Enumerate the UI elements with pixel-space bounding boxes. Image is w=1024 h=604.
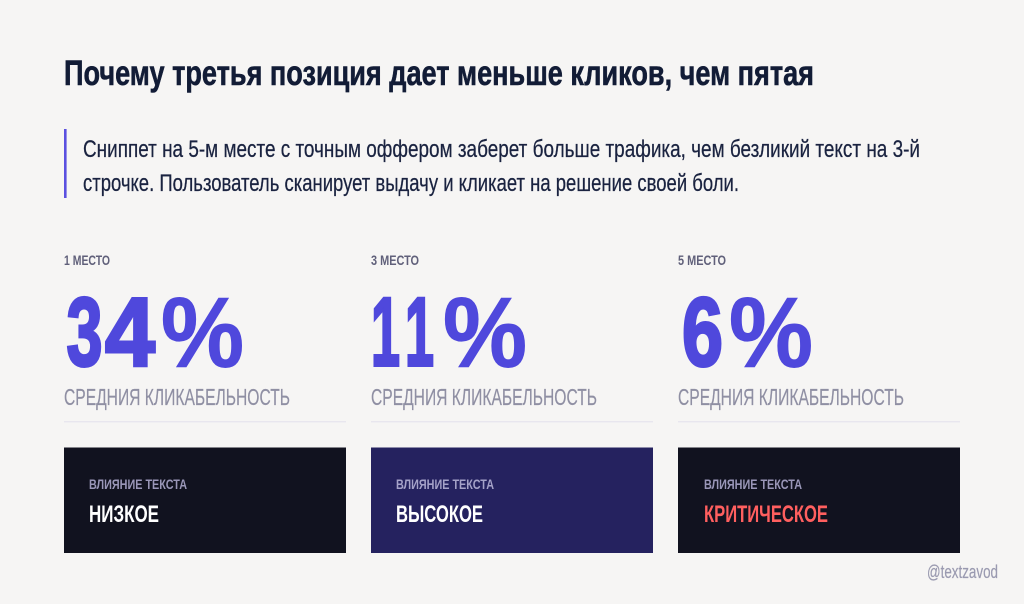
card: text influence critical [678,448,960,553]
card: text influence high: ВЫСОКОЕ [396,501,483,528]
label: 5 место: 5 МЕСТО [678,253,726,268]
callout: intro text with accent bar [64,129,920,198]
stat: 34%: % [161,276,244,388]
label: 3 место: 3 МЕСТО [371,253,419,268]
label: 1 место: 1 МЕСТО [64,253,110,268]
card: text influence high: ВЛИЯНИЕ ТЕКСТА [396,476,494,492]
callout: intro text with accent bar: строчке. Пользователь сканирует выдачу и кликает на решение своей боли. [83,170,739,197]
stat caption: СРЕДНИЯ КЛИКАБЕЛЬНОСТЬ [678,384,904,410]
credit handle: @textzavod [927,561,998,582]
stat caption: СРЕДНИЯ КЛИКАБЕЛЬНОСТЬ [371,384,597,410]
card: text influence critical: ВЛИЯНИЕ ТЕКСТА [704,476,802,492]
stat caption: СРЕДНИЯ КЛИКАБЕЛЬНОСТЬ [64,384,290,410]
card: text influence high [371,448,653,553]
stat: 11% [371,276,527,388]
panel: 1st place [64,253,346,553]
card: text influence critical: КРИТИЧЕСКОЕ [704,501,828,528]
title: Почему третья позиция дает меньше кликов, чем пятая [64,54,814,93]
stat: 11%: % [443,276,527,388]
stat: 11%: 1 [371,278,400,386]
stat: 6%: % [729,276,813,388]
stat: 34%: 3 [66,278,102,386]
stat: 34% [66,276,244,388]
panel: 3rd place [371,253,653,553]
card: text influence low: ВЛИЯНИЕ ТЕКСТА [89,476,187,492]
panel: 5th place [678,253,960,553]
stat: 11%: 1 [405,278,434,386]
stat: 34%: 4 [105,278,155,386]
card: text influence low: НИЗКОЕ [89,501,159,528]
card: text influence low [64,448,346,553]
stat: 6%: 6 [682,278,723,386]
stat: 6% [682,276,813,388]
